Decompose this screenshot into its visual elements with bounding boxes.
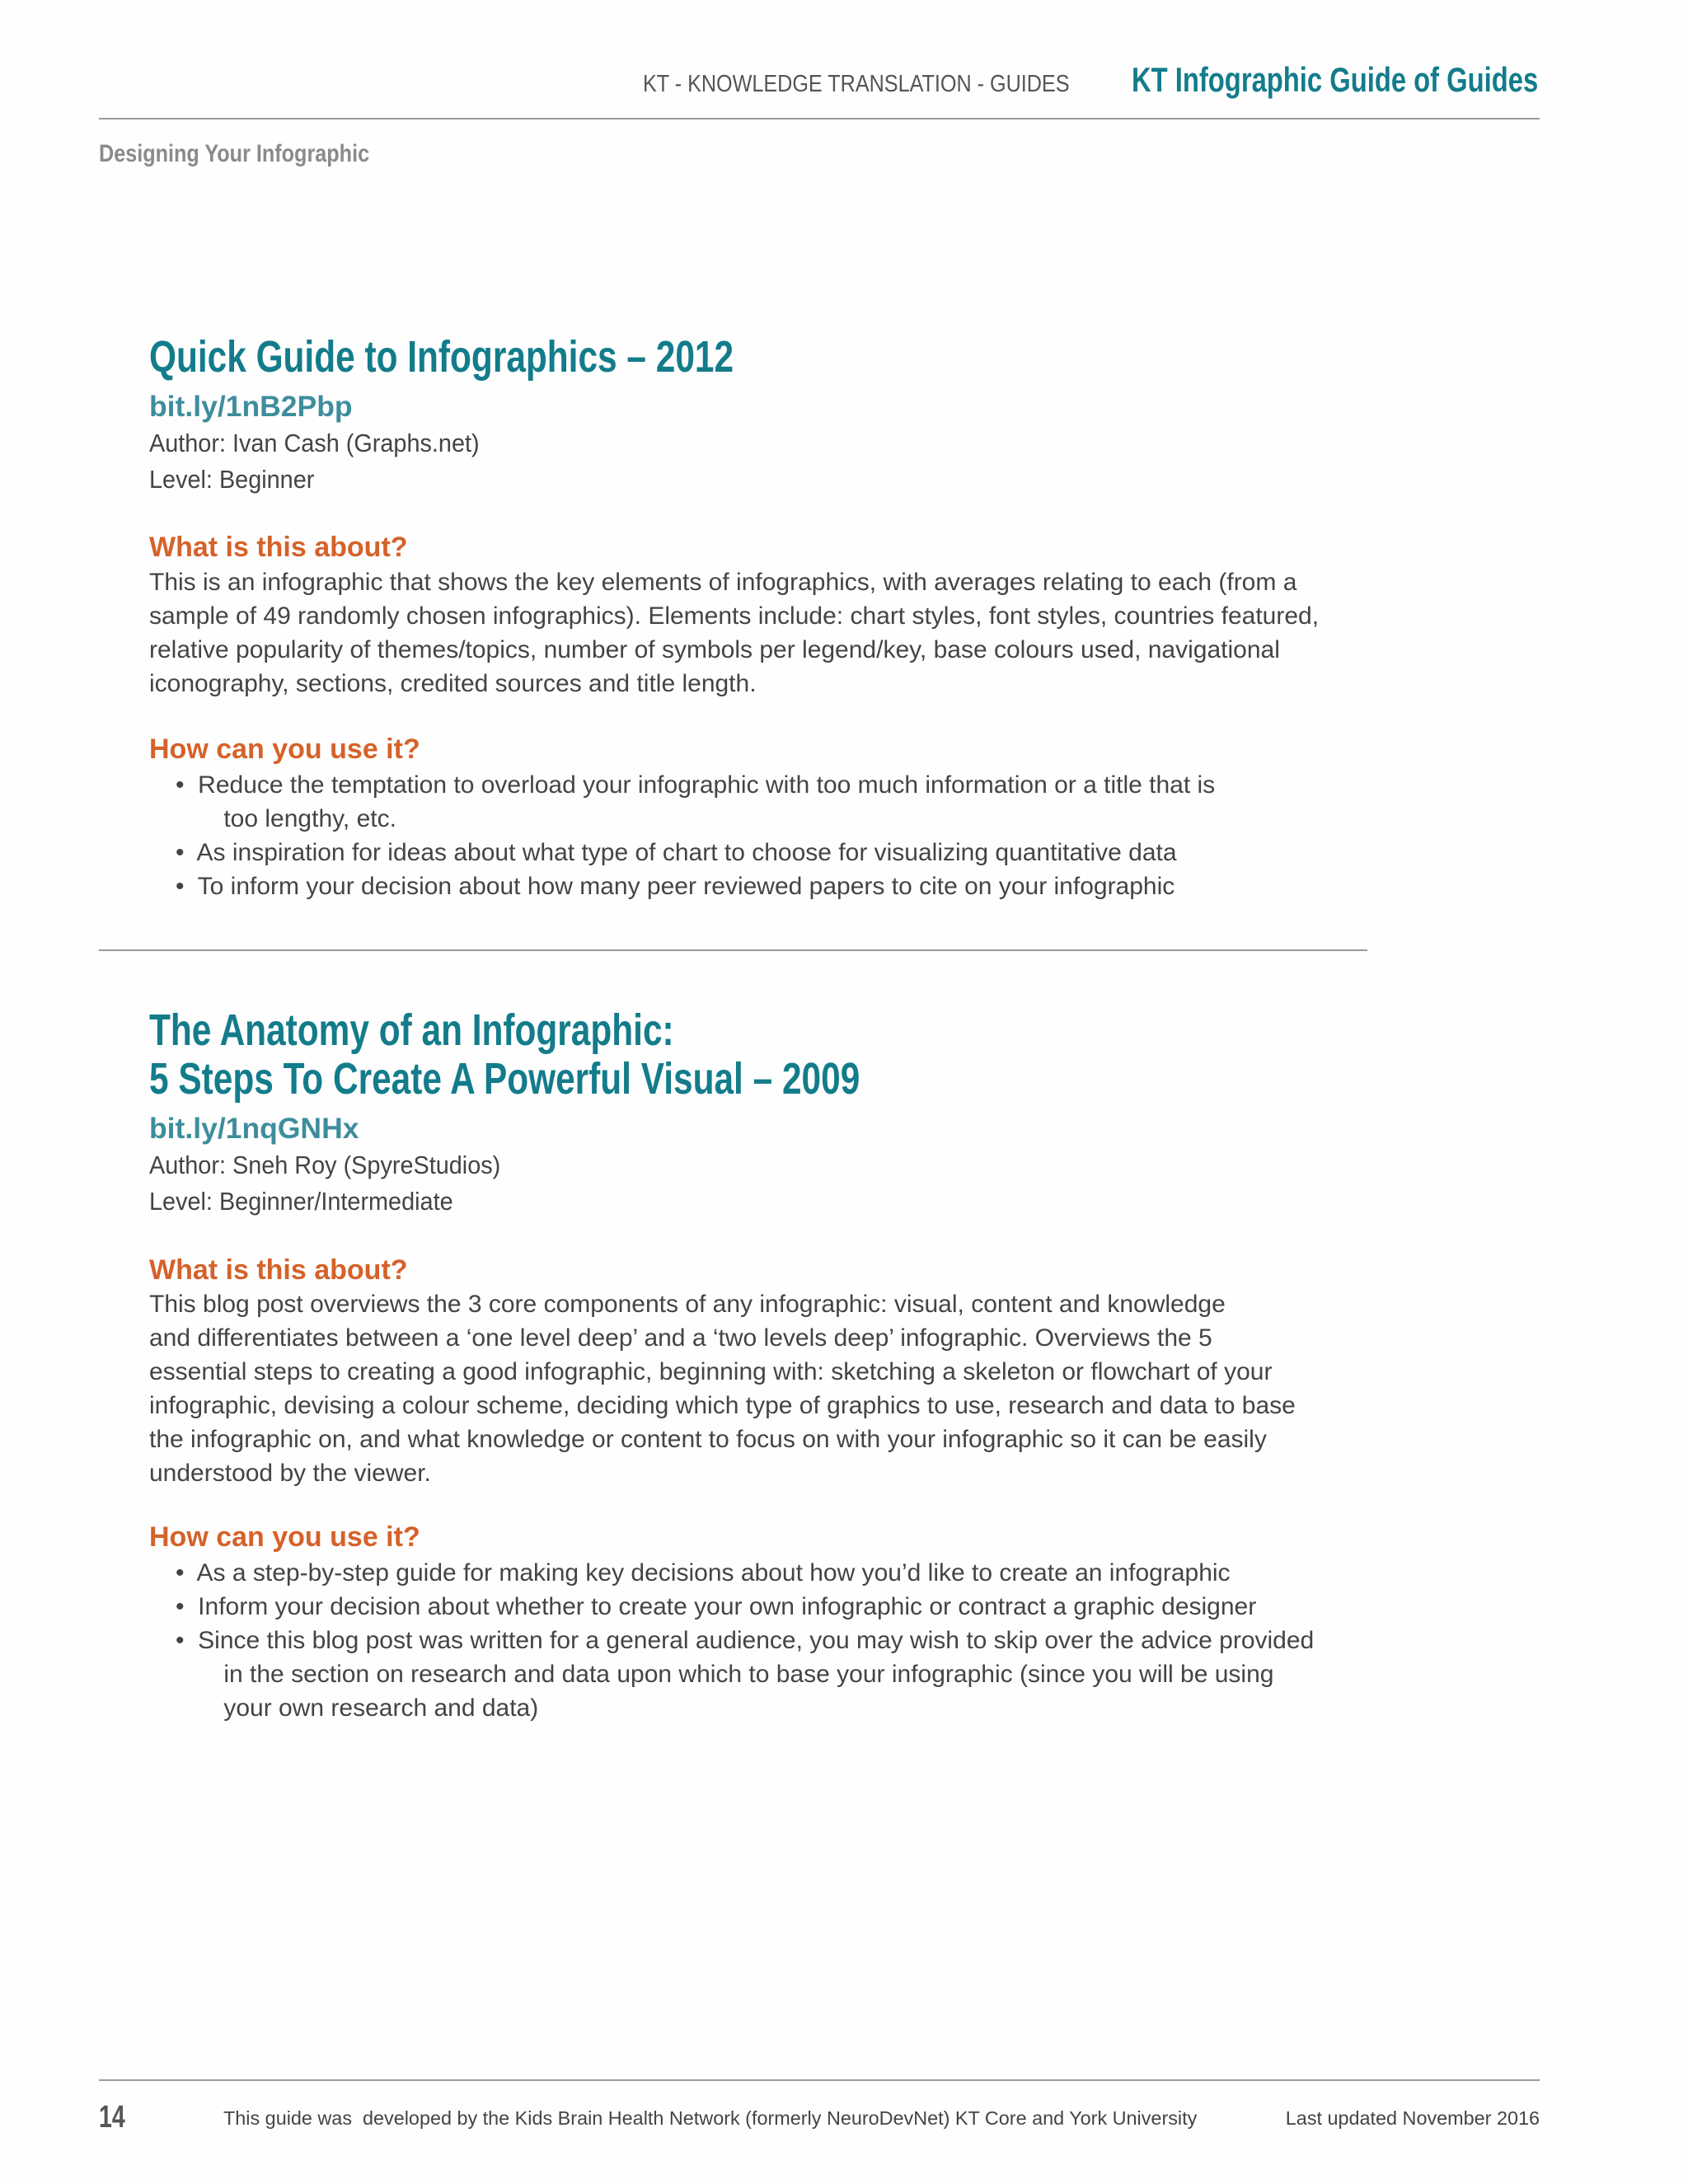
section label: Designing Your Infographic [99,140,369,167]
guide 2 paragraph: infographic, devising a colour scheme, deciding which type of graphics to use, research and data to base [149,1392,1296,1419]
guide 1 heading what: What is this about? [149,532,408,563]
guide 1 paragraph: sample of 49 randomly chosen infographics). Elements include: chart styles, font styles, countries featured, [149,602,1319,630]
guide 2 meta: Level: Beginner/Intermediate [149,1187,453,1216]
guide 2 paragraph: the infographic on, and what knowledge or content to focus on with your infographic so it can be easily [149,1426,1267,1453]
guide 1 link: bit.ly/1nB2Pbp [149,390,353,423]
guide 2 title [149,1005,860,1104]
guide 1 meta: Level: Beginner [149,465,314,494]
header title: KT Infographic Guide of Guides [1132,60,1538,99]
guide 2 bullets: your own research and data) [223,1694,538,1722]
page number: 14 [99,2100,125,2135]
guide 2 meta: Author: Sneh Roy (SpyreStudios) [149,1151,500,1179]
guide 1 [149,332,1319,900]
guide 2 paragraph: and differentiates between a ‘one level deep’ and a ‘two levels deep’ infographic. Overviews the 5 [149,1324,1212,1352]
footer credit: This guide was developed by the Kids Brain Health Network (formerly NeuroDevNet) KT Core and York University [223,2107,1197,2129]
guide 2 paragraph: essential steps to creating a good infographic, beginning with: sketching a skeleton or flowchart of your [149,1358,1272,1385]
guide 1 meta [149,429,480,494]
guide 1 bullets: • To inform your decision about how many peer reviewed papers to cite on your infographic [176,873,1175,900]
guide 1 bullets [176,771,1215,900]
guide 2 paragraph: This blog post overviews the 3 core components of any infographic: visual, content and knowledge [149,1291,1226,1318]
guide 1 paragraph: This is an infographic that shows the key elements of infographics, with averages relating to each (from a [149,569,1296,596]
guide 2 paragraph: understood by the viewer. [149,1460,431,1487]
guide 1 paragraph: iconography, sections, credited sources and title length. [149,670,757,697]
guide 2 bullets: • Since this blog post was written for a general audience, you may wish to skip over the advice provided [176,1627,1314,1654]
header label: KT - KNOWLEDGE TRANSLATION - GUIDES [643,71,1070,97]
guide 1 title: Quick Guide to Infographics – 2012 [149,332,734,382]
guide 1 bullets: • As inspiration for ideas about what type of chart to choose for visualizing quantitative data [176,839,1177,866]
guide 2 meta [149,1151,500,1216]
guide 1 paragraph [149,569,1319,697]
guide 2 bullets: • As a step-by-step guide for making key decisions about how you’d like to create an infographic [176,1559,1231,1586]
guide 2 heading how: How can you use it? [149,1521,420,1553]
guide 2 title: The Anatomy of an Infographic: [149,1005,674,1055]
guide 2 title: 5 Steps To Create A Powerful Visual – 2009 [149,1054,860,1104]
guide 1 heading how: How can you use it? [149,733,420,765]
guide 1 bullets: too lengthy, etc. [223,805,396,832]
guide 2 paragraph [149,1291,1296,1487]
guide 2 bullets: in the section on research and data upon which to base your infographic (since you will be using [223,1661,1273,1688]
guide 1 meta: Author: Ivan Cash (Graphs.net) [149,429,480,457]
guide 2 bullets: • Inform your decision about whether to create your own infographic or contract a graphic designer [176,1593,1256,1620]
footer date: Last updated November 2016 [1286,2107,1540,2129]
guide 2 [149,1005,1314,1722]
guide 2 heading what: What is this about? [149,1254,408,1286]
guide 1 paragraph: relative popularity of themes/topics, number of symbols per legend/key, base colours used, navigational [149,636,1280,663]
guide 2 bullets [176,1559,1314,1722]
guide 1 bullets: • Reduce the temptation to overload your infographic with too much information or a title that is [176,771,1215,799]
guide 2 link: bit.ly/1nqGNHx [149,1112,359,1145]
